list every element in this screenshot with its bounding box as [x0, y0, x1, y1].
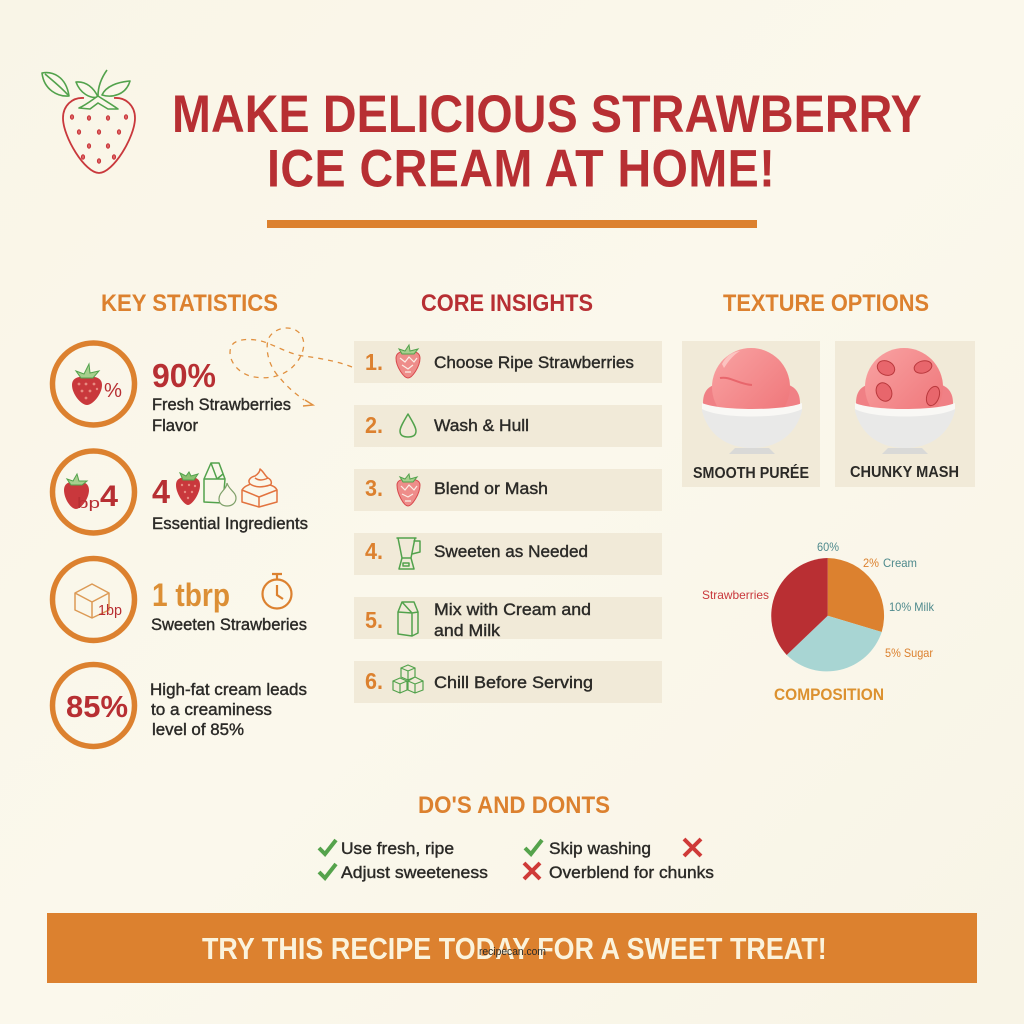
step 2: Wash & Hull: [434, 416, 529, 435]
do's and don'ts list: Overblend for chunks: [549, 863, 714, 882]
icon: milk carton: [398, 602, 418, 636]
stat label: to a creaminess: [151, 701, 272, 719]
stat ring: [52, 558, 134, 640]
icon: red strawberry: [72, 364, 102, 405]
title: ICE CREAM AT HOME!: [267, 139, 775, 198]
stat label: [152, 396, 291, 435]
step 1: 1.: [365, 349, 383, 375]
icon: strawberry with bp: [64, 474, 118, 513]
icon: strawberry with bp: bp: [77, 495, 100, 512]
call to action banner: TRY THIS RECIPE TODAY FOR A SWEET TREAT!: [202, 932, 827, 966]
icon: stopwatch: [262, 574, 292, 608]
stat label: High-fat cream leads: [150, 681, 307, 699]
icon: strawberry: [396, 345, 420, 378]
stat: 1 tbsp sweeten strawberries: [52, 558, 307, 640]
step 5: 5.: [365, 607, 383, 633]
step 6: Chill Before Serving: [434, 673, 593, 692]
title: MAKE DELICIOUS STRAWBERRY: [172, 84, 922, 144]
stat label: level of 85%: [152, 721, 244, 739]
step 4: [354, 533, 662, 575]
do's and don'ts list: [319, 839, 714, 882]
icon: strawberry logo: [42, 70, 135, 173]
step 2: 2.: [365, 412, 383, 438]
dashed arrow: [230, 328, 352, 406]
stat label: Essential Ingredients: [152, 515, 308, 533]
title underline: [267, 220, 757, 228]
icon: check: [319, 864, 336, 878]
icon: sugar cube: [75, 584, 109, 618]
step 5: Mix with Cream and: [434, 600, 591, 619]
panel: smooth puree: SMOOTH PURÉE: [693, 465, 809, 482]
stat label: Flavor: [152, 417, 199, 435]
step 4: 4.: [365, 538, 383, 564]
pie labels: 2%: [863, 556, 879, 570]
pie labels: 60%: [817, 540, 839, 554]
step 2: [354, 405, 662, 447]
stat: 90% fresh strawberries flavor: [52, 343, 291, 435]
step 3: Blend or Mash: [434, 479, 548, 498]
heading: texture options: TEXTURE OPTIONS: [723, 290, 929, 317]
panel: chunky mash: CHUNKY MASH: [850, 464, 959, 481]
call to action banner: [47, 913, 977, 983]
stat value: 85%: [66, 689, 128, 724]
stat ring: [52, 343, 134, 425]
step 3: [354, 469, 662, 511]
pie chart: composition: [702, 540, 935, 704]
icon: blender: [397, 538, 420, 569]
icon: strawberry ingredient: [176, 472, 200, 505]
pie labels: Cream: [883, 556, 917, 570]
do's and don'ts list: Use fresh, ripe: [341, 839, 454, 858]
stat: 1 tbsp sweeten strawberries: 1bp: [98, 602, 122, 619]
pie labels: Strawberries: [702, 588, 769, 602]
icon: check: [319, 840, 336, 854]
icon: water drop: [400, 414, 416, 437]
step 1: [354, 341, 662, 383]
icon: smooth scoop in bowl: [702, 348, 802, 454]
icon: chunky scoop in bowl: [855, 348, 955, 454]
heading: key statistics: KEY STATISTICS: [101, 290, 278, 317]
step 5: [354, 597, 662, 640]
stat: 4 essential ingredients: [52, 451, 308, 533]
heading: do's and donts: DO'S AND DONTS: [418, 792, 610, 819]
stat ring: [52, 664, 134, 746]
icon: strawberry with bp: 4: [100, 480, 118, 513]
step 3: 3.: [365, 475, 383, 501]
icon: strawberry: [397, 474, 420, 506]
icon: cross: [684, 839, 701, 856]
stat: 85% creaminess: [52, 664, 307, 746]
panel: smooth puree: [682, 341, 820, 487]
do's and don'ts list: Adjust sweeteness: [341, 863, 488, 882]
pie labels: 5% Sugar: [885, 646, 933, 660]
stat value: 4: [152, 473, 171, 510]
stat label: Sweeten Strawberies: [151, 616, 307, 634]
heading: core insights: CORE INSIGHTS: [421, 290, 593, 317]
icon: ice cubes: [393, 665, 423, 693]
icon: cream box: [242, 469, 277, 507]
stat ring: [52, 451, 134, 533]
step 4: Sweeten as Needed: [434, 542, 588, 561]
watermark: recipecan.com: [479, 946, 546, 958]
stat value: 1 tbrp: [152, 577, 230, 613]
pie labels: [702, 540, 935, 660]
title: [172, 84, 922, 198]
stat: 90% fresh strawberries flavor: %: [104, 380, 122, 402]
pie labels: 10% Milk: [889, 600, 935, 614]
panel: chunky mash: [835, 341, 975, 487]
do's and don'ts list: Skip washing: [549, 839, 651, 858]
stat value: 90%: [152, 357, 216, 394]
pie title: COMPOSITION: [774, 685, 884, 704]
step 6: 6.: [365, 668, 383, 694]
stat label: Fresh Strawberries: [152, 396, 291, 414]
icon: milk carton and pear: [204, 463, 236, 506]
stat label: [150, 681, 307, 739]
icon: cross: [524, 863, 540, 879]
step 6: [354, 661, 662, 703]
step 1: Choose Ripe Strawberries: [434, 353, 634, 372]
step 5: and Milk: [434, 621, 501, 640]
icon: check: [525, 840, 542, 854]
